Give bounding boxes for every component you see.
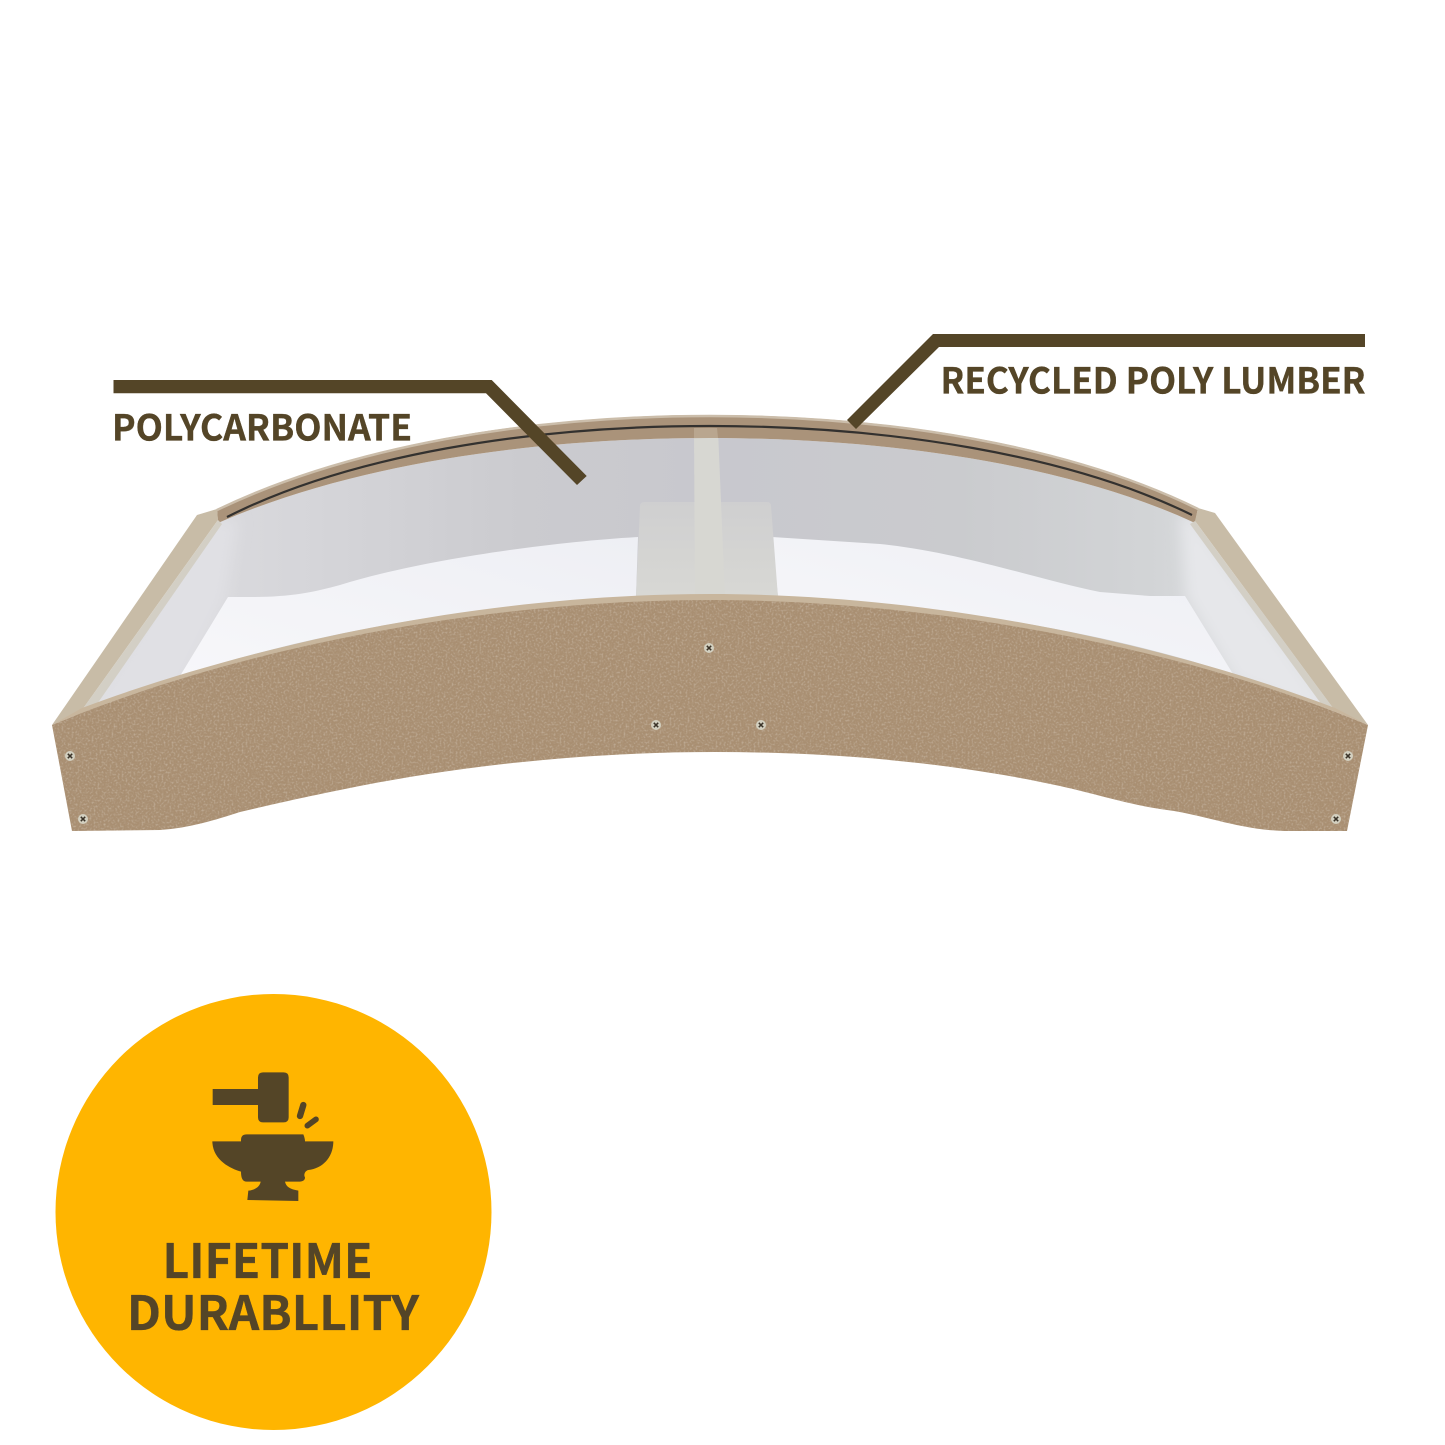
- right floor highlight: [772, 537, 1233, 674]
- back frame rail: [217, 415, 1198, 523]
- right rail inner lip: [1190, 521, 1333, 708]
- front board top edge: [52, 594, 1368, 725]
- label: recycled poly lumber: RECYCLED POLY LUMBER: [940, 352, 1366, 404]
- polycarbonate glazing interior: [82, 438, 1335, 710]
- side wall shading: [90, 515, 1330, 720]
- badge circle: [56, 994, 492, 1430]
- leader line: polycarbonate: [114, 380, 587, 485]
- badge text: lifetime: LIFETIME: [162, 1223, 372, 1292]
- right side rail: [1195, 508, 1368, 725]
- centre strip cap: [694, 428, 718, 438]
- cross beam: [636, 502, 778, 597]
- back frame top highlight: [217, 416, 1198, 510]
- badge text: durability: DURABLLITY: [127, 1275, 419, 1344]
- left rail inner lip: [82, 520, 222, 710]
- leader line: recycled poly lumber: [847, 334, 1365, 429]
- badge: lifetime durability: [56, 994, 492, 1430]
- black gap line: [227, 426, 1192, 517]
- left floor highlight: [180, 537, 638, 676]
- left side rail: [52, 509, 218, 725]
- centre support strip: [694, 430, 725, 597]
- screws: [65, 643, 1353, 824]
- product: curved polycarbonate and poly lumber awning: [52, 415, 1368, 831]
- icon: hammer and anvil: [212, 1072, 333, 1201]
- label: polycarbonate: POLYCARBONATE: [112, 400, 412, 452]
- front board: [52, 600, 1368, 831]
